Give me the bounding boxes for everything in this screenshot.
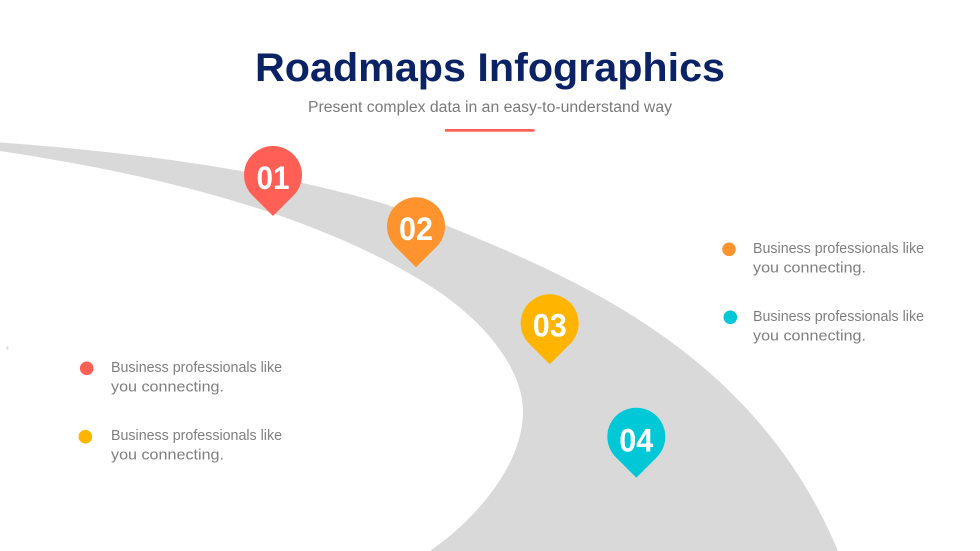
pin 04: 04 xyxy=(619,422,653,458)
legend item: red: Business professionals like xyxy=(111,360,282,376)
legend item: teal xyxy=(724,309,924,344)
legend item: red: you connecting. xyxy=(111,380,224,396)
pin 01: 01 xyxy=(256,160,290,196)
pin 03: 03 xyxy=(533,308,567,344)
pin 01 xyxy=(244,146,302,216)
legend item: teal: Business professionals like xyxy=(753,309,924,325)
legend item: red xyxy=(80,360,282,396)
subtitle: Present complex data in an easy-to-understand way xyxy=(308,99,672,116)
pin 03 xyxy=(521,294,579,364)
pin 04 xyxy=(607,408,665,478)
legend item: teal: you connecting. xyxy=(753,328,866,344)
legend item: orange: Business professionals like xyxy=(753,241,924,257)
legend item: orange xyxy=(722,241,924,276)
legend item: yellow: you connecting. xyxy=(111,448,224,464)
pin 02 xyxy=(387,197,445,267)
title underline xyxy=(445,129,534,132)
pin 02: 02 xyxy=(399,211,433,247)
legend item: yellow xyxy=(79,428,282,464)
slide number: 4 xyxy=(6,346,9,352)
title: Roadmaps Infographics xyxy=(255,46,725,90)
legend item: orange: you connecting. xyxy=(753,260,866,276)
road xyxy=(0,142,838,551)
legend item: yellow: Business professionals like xyxy=(111,428,282,444)
